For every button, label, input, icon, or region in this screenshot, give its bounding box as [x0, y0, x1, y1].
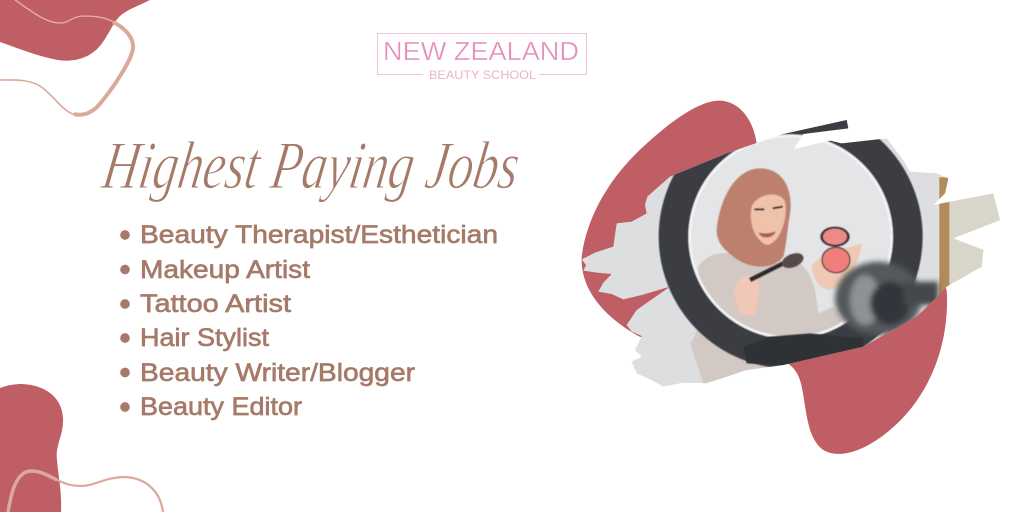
scarf: [717, 168, 791, 267]
list item 4: Hair Stylist: [140, 324, 269, 352]
logo: New Zealand Beauty School: BEAUTY SCHOOL: [429, 68, 536, 82]
ring base mount: [743, 333, 863, 365]
eyes: [754, 207, 783, 209]
blurred camera: [835, 262, 938, 335]
job list: [120, 221, 498, 421]
logo: New Zealand Beauty School: [378, 34, 586, 82]
blush compact: [820, 227, 850, 247]
left hand and brush: [733, 275, 760, 317]
photo in brush-stroke mask: [582, 120, 1000, 386]
lips: [758, 231, 776, 237]
decoration: top-left corner blob and line: [0, 0, 150, 115]
inner backdrop: [743, 143, 756, 148]
list item 5: Beauty Writer/Blogger: [140, 359, 415, 387]
red blob behind photo: [582, 101, 947, 454]
right hand: [812, 243, 862, 290]
logo: New Zealand Beauty School: NEW ZEALAND: [383, 36, 579, 66]
title: Highest Paying Jobs: [97, 127, 525, 203]
list item 6: Beauty Editor: [140, 393, 302, 421]
jacket: [690, 253, 842, 383]
decoration: bottom-left corner blob and line: [0, 384, 163, 512]
list item 3: Tattoo Artist: [140, 290, 291, 318]
list item 2: Makeup Artist: [140, 256, 310, 284]
ring light: [674, 120, 907, 353]
face: [751, 195, 786, 245]
list item 1: Beauty Therapist/Esthetician: [140, 221, 498, 249]
wall and wood post: [939, 177, 1000, 294]
hero illustration: [570, 101, 1010, 454]
presenter: [690, 168, 862, 383]
